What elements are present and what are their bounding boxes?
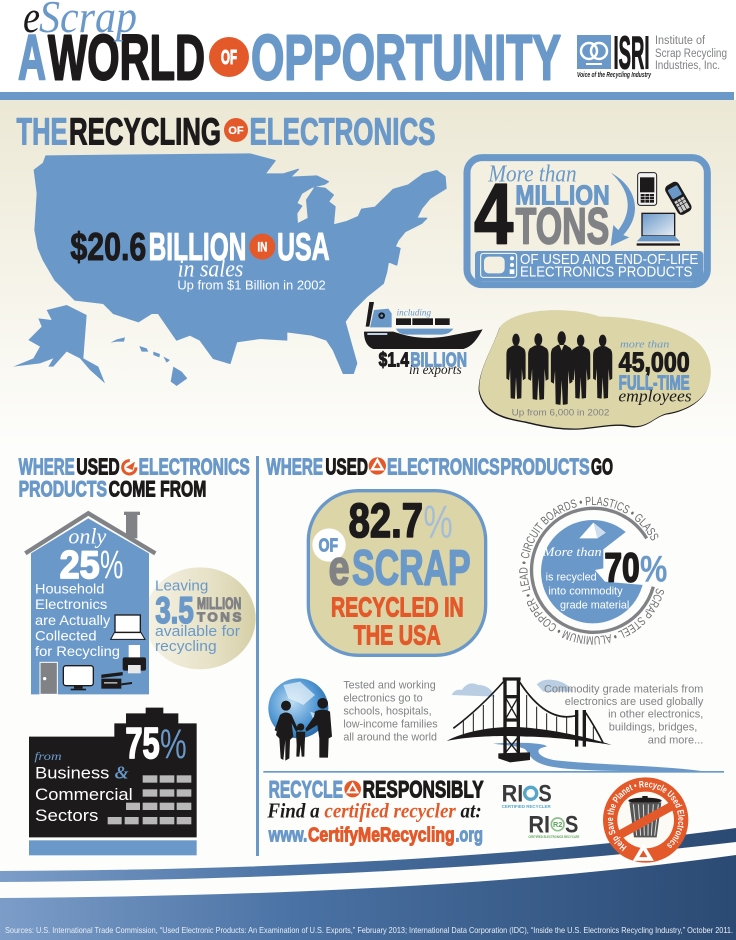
- logo: RIOS certified recycler: [502, 781, 552, 809]
- house: Collected: [35, 628, 97, 644]
- heading: PRODUCTS: [19, 476, 107, 501]
- text: tested and working: [343, 679, 438, 743]
- title: A: [18, 22, 46, 94]
- panel: where products come from: [19, 454, 256, 855]
- recycle responsibly: Find a certified recycler at:: [266, 799, 482, 823]
- label bar: ELECTRONICS PRODUCTS: [520, 265, 693, 281]
- icon: laptop: [111, 615, 145, 639]
- badge: more than 70%: %: [640, 548, 667, 590]
- heading: USED: [325, 454, 368, 480]
- text: commodity grade materials: Commodity grade materials from: [544, 683, 703, 695]
- badge: more than 70%: SCRAP STEEL • ALUMINUM • COPPER • LEAD • CIRCUIT BOARDS • PLASTICS • GLASS: [519, 496, 664, 645]
- sales figure: IN: [257, 239, 267, 255]
- heading: USED: [76, 454, 120, 480]
- map of the USA: [13, 154, 446, 386]
- callout ellipse: 3.5 million tons: available for: [155, 624, 240, 640]
- page background: [0, 100, 736, 445]
- logo: RIOS certified recycler: S: [538, 781, 552, 808]
- sales figure: BILLION: [149, 225, 246, 269]
- logo: RIOS R2: [528, 812, 579, 839]
- badge: more than 70%: is recycled: [546, 572, 597, 584]
- heading: the recycling of electronics: [16, 112, 436, 154]
- title: OF: [221, 47, 237, 69]
- ship with export figure: BILLION: [410, 349, 467, 371]
- text: commodity grade materials: in other electronics,: [608, 709, 703, 721]
- callout ellipse: 3.5 million tons: [144, 567, 256, 669]
- panel: 4 million tons: TONS: [516, 198, 609, 255]
- recycle responsibly: [266, 776, 484, 846]
- sales figure: $20.6: [70, 225, 146, 269]
- icon: cell phone: [663, 180, 693, 217]
- house: for Recycling: [35, 643, 120, 659]
- callout: 82.7% of eScrap recycled in the USA: %: [423, 495, 453, 547]
- heading: GO: [591, 454, 613, 480]
- river: [493, 743, 707, 772]
- callout ellipse: 3.5 million tons: 3.5: [155, 590, 194, 631]
- heading: PRODUCTS: [500, 454, 590, 480]
- heading: the recycling of electronics: THE: [16, 112, 68, 154]
- ISRI logo: Scrap Recycling: [655, 48, 727, 60]
- recycle responsibly: .org: [455, 824, 483, 846]
- panel: 4 million tons: MILLION: [515, 180, 610, 211]
- badge: more than 70%: More than: [542, 545, 602, 559]
- ship with export figure: [364, 302, 483, 377]
- recycle responsibly: CertifyMeRecycling: [308, 824, 455, 846]
- ship with export figure: $1.4: [379, 349, 410, 371]
- panel: 4 million tons: 4: [474, 167, 513, 263]
- icon: printer: [123, 645, 146, 673]
- callout: 82.7% of eScrap recycled in the USA: [308, 491, 486, 655]
- icon: monitor: [63, 666, 93, 690]
- panel: employees cloud: Up from 6,000 in 2002: [512, 408, 609, 418]
- bridge: [447, 678, 612, 762]
- heading: WHERE: [266, 454, 323, 480]
- text: tested and working: low-income families: [343, 718, 438, 730]
- badge: more than 70%: into commodity: [548, 585, 623, 597]
- label bar: [475, 251, 703, 281]
- callout: 82.7% of eScrap recycled in the USA: RECYCLED IN: [331, 591, 464, 622]
- ISRI logo: Voice of the Recycling Industry: [577, 72, 652, 79]
- building: Business: [35, 763, 109, 782]
- text: commodity grade materials: and more...: [648, 735, 703, 747]
- building: from: [34, 749, 62, 763]
- sales figure: in sales: [178, 257, 243, 283]
- text: tested and working: schools, hospitals,: [343, 705, 432, 717]
- building: Sectors: [35, 806, 98, 825]
- Alaska: [13, 305, 105, 383]
- icon: copier: [101, 672, 132, 689]
- title: OPPORTUNITY: [251, 22, 561, 94]
- callout: 82.7% of eScrap recycled in the USA: 82.7: [349, 494, 423, 548]
- ISRI logo: Industries, Inc.: [655, 60, 720, 72]
- heading: the recycling of electronics: OF: [228, 125, 244, 137]
- heading: [19, 454, 250, 501]
- swoosh bands: [0, 828, 736, 940]
- icon: laptop: [637, 213, 680, 246]
- Hawaii: [111, 337, 187, 386]
- panel: employees cloud: more than: [620, 339, 669, 350]
- heading: the recycling of electronics: RECYCLING: [69, 112, 221, 154]
- logo: RIOS R2: RI: [528, 812, 550, 839]
- building: &: [115, 762, 129, 782]
- recycle responsibly: RECYCLE: [269, 776, 343, 803]
- sales figure: Up from $1 Billion in 2002: [177, 277, 326, 292]
- contiguous states: [34, 154, 446, 373]
- panel: employees cloud: [479, 310, 711, 430]
- callout: 82.7% of eScrap recycled in the USA: SCRAP: [352, 541, 471, 596]
- panel: 4 million tons: [467, 158, 707, 285]
- ship with export figure: in exports: [409, 362, 462, 377]
- house: Household: [35, 580, 104, 596]
- badge: more than 70%: 70: [604, 544, 640, 590]
- label bar: OF USED AND END-OF-LIFE: [520, 252, 699, 268]
- logo: RIOS certified recycler: RI: [502, 781, 523, 808]
- text: commodity grade materials: [544, 683, 704, 747]
- icon: clouds: [452, 680, 573, 697]
- text: tested and working: electronics go to: [343, 693, 423, 705]
- icon: door: [40, 662, 57, 694]
- logo: RIOS R2: R2: [553, 820, 562, 829]
- ship with export figure: including: [397, 308, 432, 318]
- title: WORLD: [48, 22, 205, 94]
- badge: more than 70%: grade material: [560, 599, 629, 611]
- logo: RIOS R2: CERTIFIED ELECTRONICS RECYCLER: [528, 834, 579, 839]
- callout ellipse: 3.5 million tons: MILLION: [197, 594, 241, 613]
- house: %: [100, 543, 123, 587]
- text: commodity grade materials: buildings, bridges,: [609, 722, 697, 734]
- building: %: [160, 721, 187, 767]
- heading: ELECTRONICS: [139, 454, 250, 480]
- building: [29, 708, 197, 855]
- heading: COME FROM: [109, 476, 206, 501]
- callout ellipse: 3.5 million tons: Leaving: [155, 579, 208, 595]
- title: [18, 0, 561, 94]
- building: 75: [125, 720, 160, 768]
- logo: RIOS R2: S: [565, 812, 578, 839]
- ISRI logo: [577, 26, 727, 79]
- logo: RIOS certified recycler: CERTIFIED RECYCLER: [502, 804, 551, 809]
- panel: where products go: [266, 454, 667, 657]
- icon: smartphone: [638, 173, 657, 205]
- sales figure: USA: [277, 225, 330, 269]
- house: [25, 512, 155, 694]
- callout ellipse: 3.5 million tons: TONS: [197, 609, 241, 624]
- text: commodity grade materials: electronics are used globally: [565, 696, 704, 708]
- callout: 82.7% of eScrap recycled in the USA: THE USA: [354, 620, 441, 651]
- heading: the recycling of electronics: ELECTRONICS: [250, 112, 436, 154]
- house: only: [68, 523, 106, 548]
- heading: WHERE: [19, 454, 75, 480]
- ISRI logo: ISRI: [614, 26, 650, 78]
- icon: curved arrow: [611, 173, 635, 246]
- building: Commercial: [35, 785, 133, 804]
- callout ellipse: 3.5 million tons: recycling: [155, 639, 217, 655]
- panel: employees cloud: 45,000: [619, 346, 690, 377]
- panel: employees cloud: FULL-TIME: [619, 373, 690, 395]
- text: tested and working: all around the world: [343, 731, 437, 743]
- recycle responsibly: www.: [268, 824, 307, 846]
- sales figure: [70, 225, 330, 292]
- panel: employees cloud: employees: [618, 387, 692, 406]
- panel: 4 million tons: More than: [487, 162, 577, 188]
- silhouettes: five workers: [506, 331, 612, 405]
- house: are Actually: [35, 612, 110, 628]
- house: Electronics: [35, 596, 107, 612]
- lower background: [0, 445, 736, 940]
- heading: [266, 454, 613, 480]
- recycle responsibly: RESPONSIBLY: [363, 776, 484, 803]
- ISRI logo: Institute of: [655, 35, 706, 47]
- windows: [108, 775, 191, 824]
- house: 25: [60, 544, 100, 587]
- badge: help save the planet: Help Save the Planet • Recycle Used Electronics: [607, 781, 685, 852]
- heading: ELECTRONICS: [387, 454, 500, 480]
- callout: 82.7% of eScrap recycled in the USA: OF: [319, 535, 338, 556]
- callout: 82.7% of eScrap recycled in the USA: e: [329, 541, 350, 596]
- text: tested and working: Tested and working: [343, 679, 436, 691]
- lower panel: [263, 677, 724, 863]
- globe and family: [268, 678, 332, 761]
- icon: trash can: [628, 796, 662, 837]
